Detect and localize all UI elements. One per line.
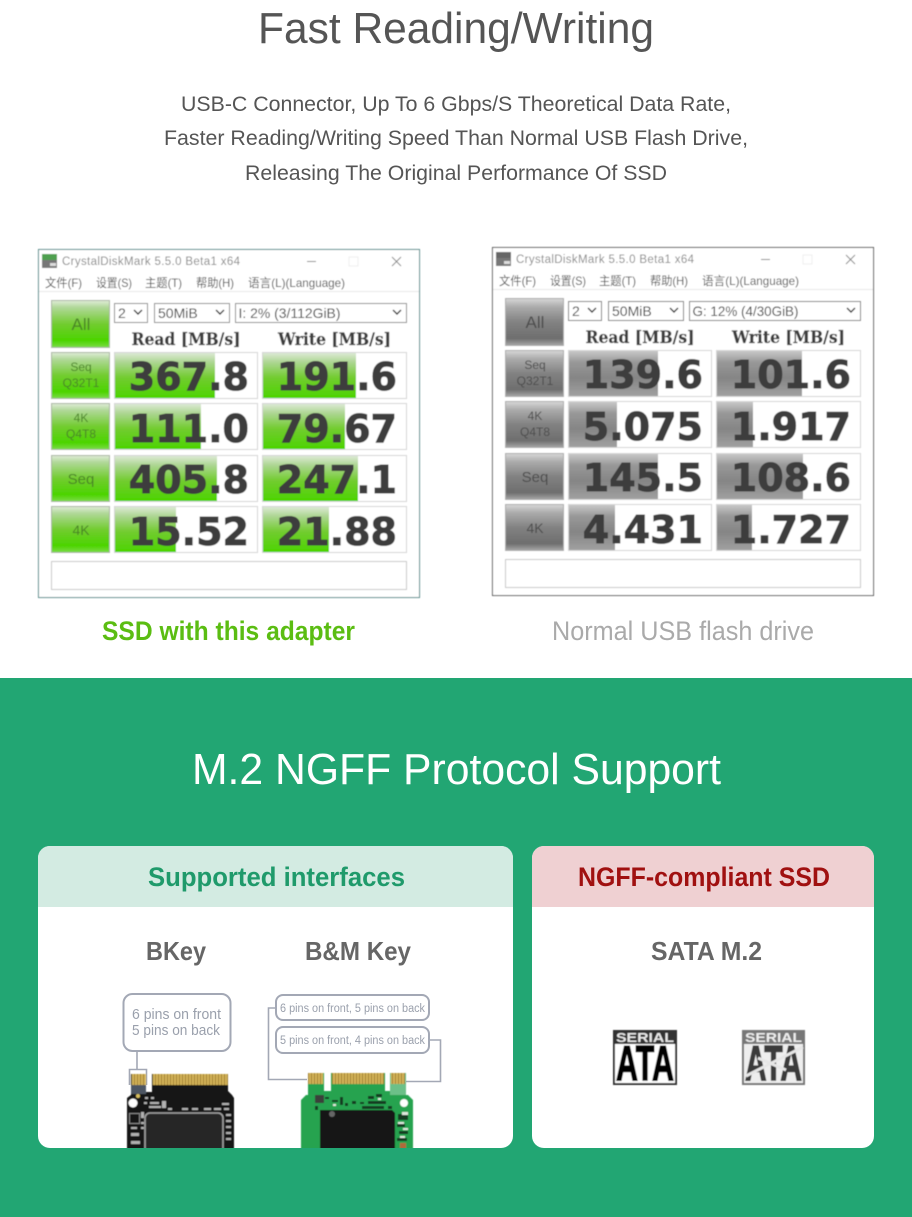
panel: CrystalDiskMark SSD results: 4K <box>74 411 88 425</box>
panel: CrystalDiskMark SSD results: 21.88 <box>277 510 397 554</box>
label: BKey: BKey <box>146 936 206 966</box>
panel: CrystalDiskMark USB flash drive results: 文件(F) <box>499 273 536 288</box>
panel: CrystalDiskMark USB flash drive results: 4K <box>526 520 544 536</box>
callout: BKey pins: 6 pins on front <box>132 1007 221 1023</box>
panel: CrystalDiskMark USB flash drive results: 1.917 <box>731 405 851 449</box>
panel: CrystalDiskMark USB flash drive results: 4.431 <box>583 508 703 552</box>
description text block <box>164 92 748 185</box>
icon: Serial ATA logo black: SERIAL <box>616 1031 674 1045</box>
panel: CrystalDiskMark SSD results: All <box>72 315 90 334</box>
panel: CrystalDiskMark SSD results: 405.8 <box>129 458 249 502</box>
panel: CrystalDiskMark SSD results: Q4T8 <box>66 427 96 441</box>
callout: BKey pins <box>124 994 230 1085</box>
panel: CrystalDiskMark SSD results: 文件(F) <box>45 275 82 290</box>
panel: CrystalDiskMark SSD results: 语言(L)(Language) <box>248 276 345 290</box>
panel: supported interfaces <box>38 846 513 1155</box>
label: B&M Key: B&M Key <box>305 936 411 966</box>
icon: Serial ATA logo grey: ATA <box>745 1037 802 1091</box>
icon: Serial ATA logo grey <box>742 1030 805 1091</box>
heading: NGFF-compliant SSD: NGFF-compliant SSD <box>578 862 830 892</box>
caption: Normal USB flash drive: Normal USB flash drive <box>552 616 814 646</box>
panel: CrystalDiskMark SSD results: 111.0 <box>129 407 249 451</box>
panel: CrystalDiskMark SSD results: Write [MB/s] <box>277 330 391 350</box>
panel: CrystalDiskMark USB flash drive results: 5.075 <box>583 405 703 449</box>
panel: CrystalDiskMark USB flash drive results: 2 <box>572 303 580 319</box>
description text block: Releasing The Original Performance Of SSD <box>245 161 667 185</box>
panel: CrystalDiskMark USB flash drive results: Read [MB/s] <box>586 328 694 348</box>
panel: CrystalDiskMark USB flash drive results: Q4T8 <box>520 425 550 439</box>
panel: CrystalDiskMark USB flash drive results: 4K <box>528 409 542 423</box>
icon: Serial ATA logo black <box>613 1030 677 1091</box>
illustration: green B&M key SSD board <box>301 1073 413 1155</box>
callout: BKey pins: 5 pins on back <box>132 1023 221 1039</box>
label: SATA M.2: SATA M.2 <box>651 936 762 966</box>
panel: CrystalDiskMark SSD results: 4K <box>72 522 90 538</box>
panel: NGFF-compliant SSD <box>532 846 874 1148</box>
description text block: Faster Reading/Writing Speed Than Normal USB Flash Drive, <box>164 126 748 150</box>
panel: CrystalDiskMark SSD results: 50MiB <box>158 305 198 321</box>
panel: CrystalDiskMark USB flash drive results: 50MiB <box>612 303 652 319</box>
panel: CrystalDiskMark SSD results: 191.6 <box>277 355 397 399</box>
panel: CrystalDiskMark USB flash drive results: 101.6 <box>731 353 851 397</box>
page background <box>0 0 912 678</box>
panel: CrystalDiskMark SSD results: CrystalDiskMark 5.5.0 Beta1 x64 <box>62 256 241 268</box>
panel: CrystalDiskMark SSD results <box>38 250 420 598</box>
title: Fast Reading/Writing: Fast Reading/Writing <box>258 4 654 53</box>
panel: CrystalDiskMark USB flash drive results: 145.5 <box>583 456 703 500</box>
icon: Serial ATA logo grey: SERIAL <box>745 1031 802 1045</box>
panel: CrystalDiskMark SSD results: 367.8 <box>129 355 249 399</box>
panel: CrystalDiskMark SSD results: 15.52 <box>129 510 249 554</box>
panel: CrystalDiskMark SSD results: 设置(S) <box>96 276 132 290</box>
panel: CrystalDiskMark SSD results: 帮助(H) <box>196 276 234 290</box>
panel: CrystalDiskMark USB flash drive results: 语言(L)(Language) <box>702 274 799 288</box>
panel: CrystalDiskMark USB flash drive results: G: 12% (4/30GiB) <box>692 303 798 319</box>
panel: CrystalDiskMark SSD results: Read [MB/s] <box>132 330 240 350</box>
panel: CrystalDiskMark USB flash drive results: 主题(T) <box>599 274 636 288</box>
panel: CrystalDiskMark SSD results: 主题(T) <box>145 276 182 290</box>
panel: CrystalDiskMark USB flash drive results: Write [MB/s] <box>731 328 845 348</box>
panel: CrystalDiskMark USB flash drive results: 设置(S) <box>550 274 586 288</box>
icon: Serial ATA logo black: ATA <box>616 1037 674 1091</box>
heading: M.2 NGFF Protocol Support: M.2 NGFF Protocol Support <box>192 745 721 794</box>
panel: CrystalDiskMark USB flash drive results: 1.727 <box>731 508 851 552</box>
caption: SSD with this adapter: SSD with this adapter <box>102 616 355 646</box>
panel: CrystalDiskMark SSD results: 247.1 <box>277 458 397 502</box>
panel: CrystalDiskMark SSD results: 79.67 <box>277 407 397 451</box>
panel: CrystalDiskMark USB flash drive results: 108.6 <box>731 456 851 500</box>
panel: CrystalDiskMark USB flash drive results: CrystalDiskMark 5.5.0 Beta1 x64 <box>516 254 695 266</box>
illustration: black BKey SSD board <box>127 1074 234 1155</box>
panel: CrystalDiskMark USB flash drive results: 帮助(H) <box>650 274 688 288</box>
panel: CrystalDiskMark SSD results: Seq <box>68 471 94 488</box>
panel: CrystalDiskMark SSD results: Seq <box>70 360 92 374</box>
panel: CrystalDiskMark USB flash drive results: Seq <box>524 358 546 372</box>
panel: CrystalDiskMark SSD results: 2 <box>118 305 126 321</box>
panel: CrystalDiskMark USB flash drive results: All <box>526 313 544 332</box>
green section background <box>0 678 912 1217</box>
panel: CrystalDiskMark USB flash drive results: Seq <box>522 469 548 486</box>
description text block: USB-C Connector, Up To 6 Gbps/S Theoretical Data Rate, <box>181 92 731 116</box>
callouts: B&M key pins <box>268 995 440 1082</box>
panel: CrystalDiskMark USB flash drive results: 139.6 <box>583 353 703 397</box>
panel: CrystalDiskMark USB flash drive results <box>492 248 874 596</box>
panel: CrystalDiskMark SSD results: I: 2% (3/112GiB) <box>238 305 340 321</box>
callouts: B&M key pins: 5 pins on front, 4 pins on back <box>280 1035 425 1047</box>
heading: supported interfaces: Supported interfaces <box>148 862 405 892</box>
panel: CrystalDiskMark USB flash drive results: Q32T1 <box>517 374 554 388</box>
callouts: B&M key pins: 6 pins on front, 5 pins on back <box>280 1003 425 1015</box>
panel: CrystalDiskMark SSD results: Q32T1 <box>63 376 100 390</box>
